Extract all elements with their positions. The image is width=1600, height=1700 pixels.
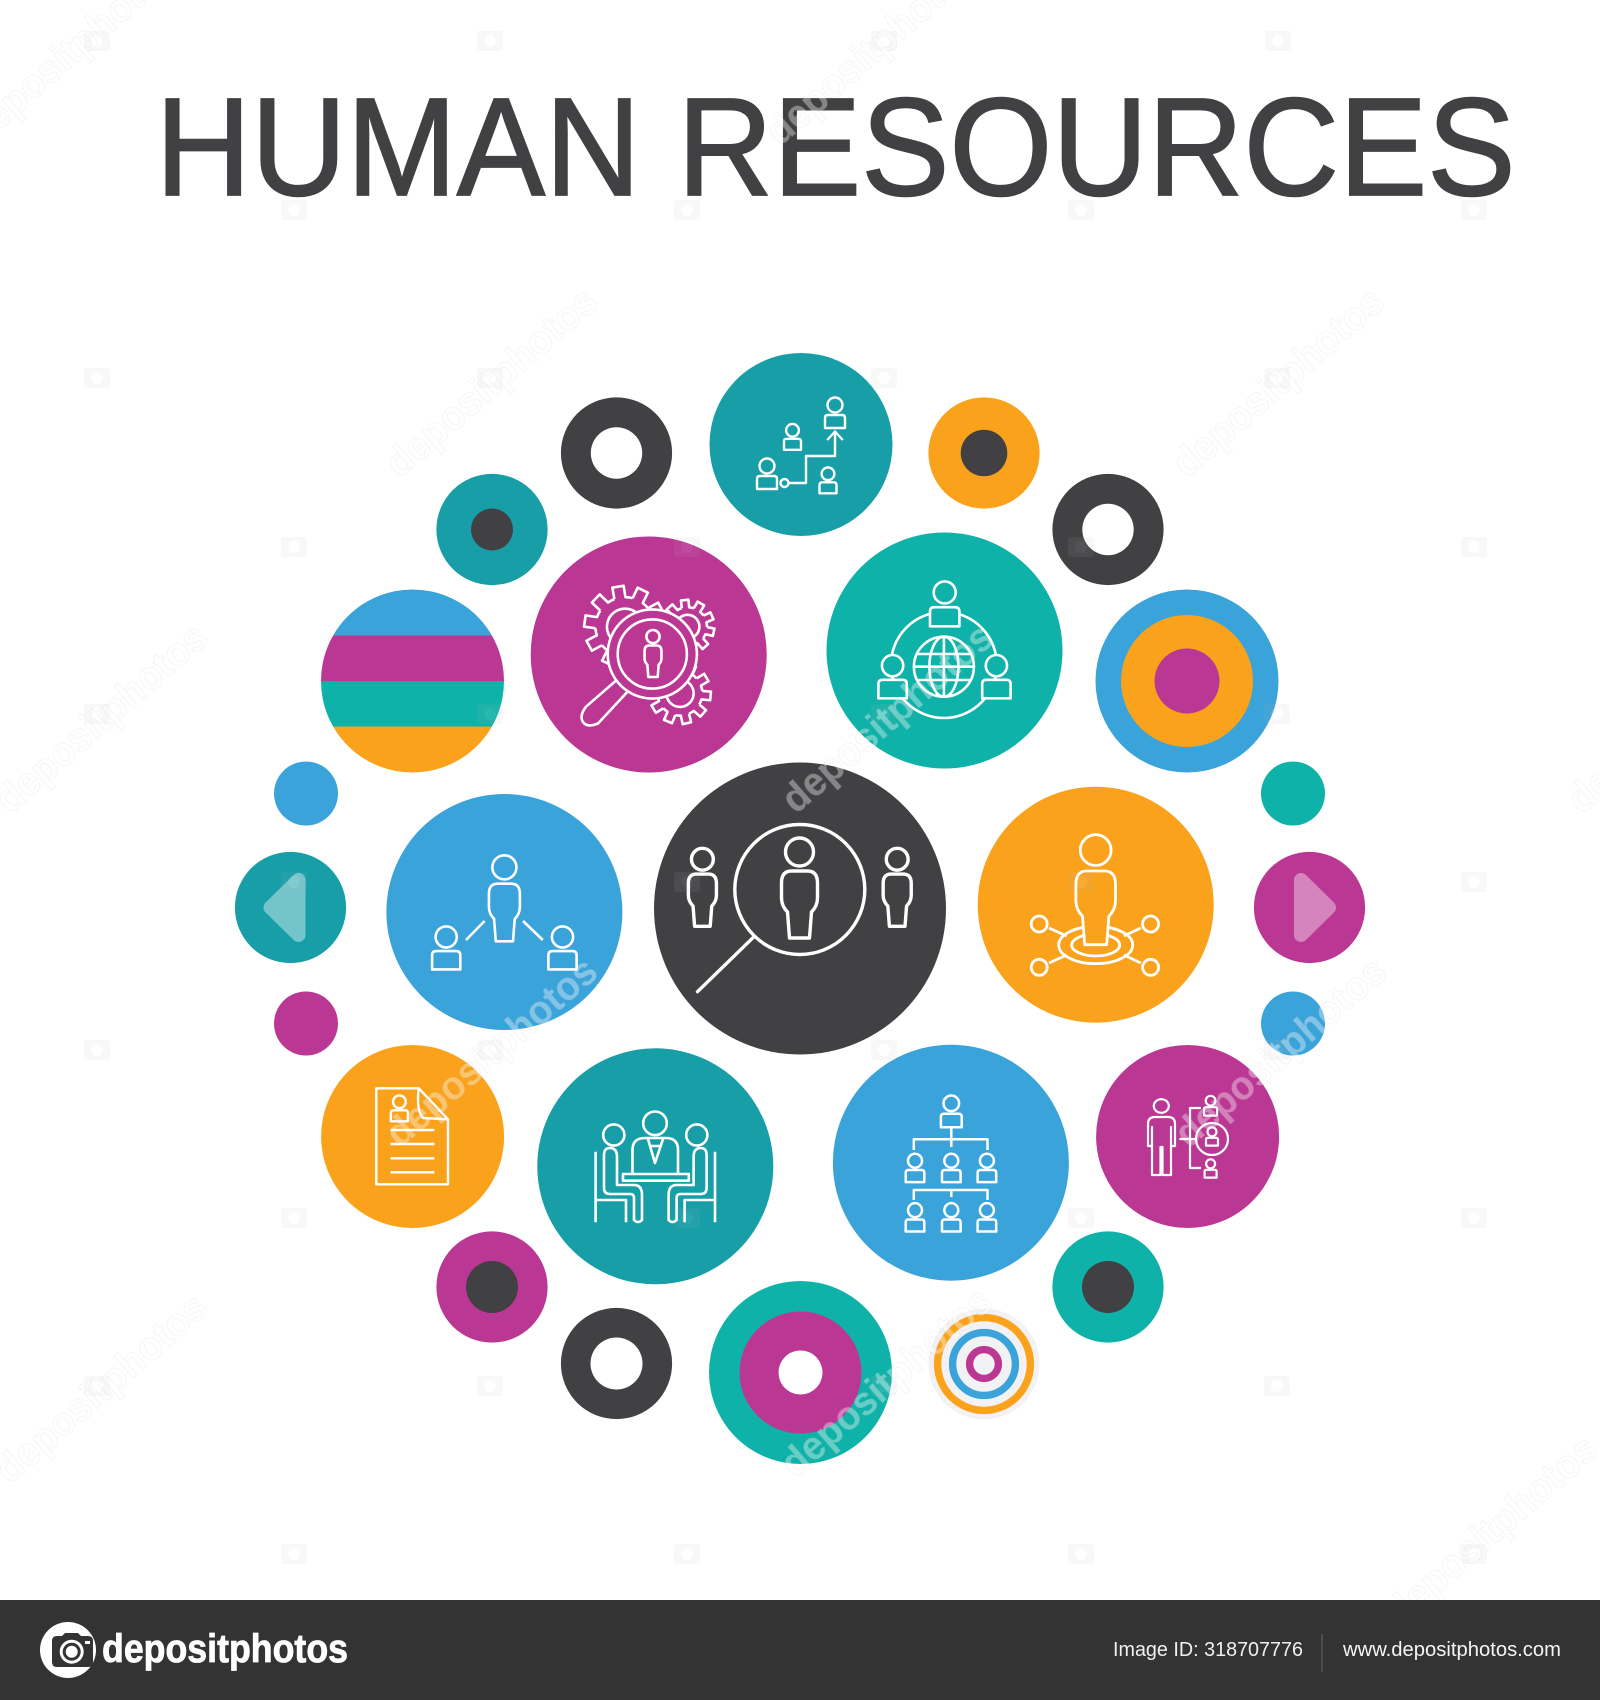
ring centre: dark lower right [1082,1261,1134,1313]
watermark text: depositphotos [772,1279,1001,1486]
bubble: person hub [978,787,1214,1023]
icon: right triangle [1301,880,1329,935]
bubble: resume [321,1045,504,1228]
dot: blue right [1261,992,1325,1056]
icon: person on network hub [1031,835,1159,975]
ring centre: dark lower left [466,1261,518,1313]
ring centre: white top left [591,427,642,479]
bubble: org chart [833,1045,1069,1281]
bubble: career steps [710,353,892,536]
ring: orange top right [928,397,1040,509]
watermark camera marks [84,31,1487,1564]
icon: talent search gears [579,579,719,728]
footer separator [1322,1634,1323,1672]
infographic circle diagram [235,353,1365,1464]
bubble: central search [654,762,946,1054]
footer bar [0,1600,1600,1700]
ring centre: dark top right [961,430,1007,476]
icon: left triangle [270,880,298,935]
ring: dark bottom left [561,1308,672,1419]
ring centre: white upper right [1082,504,1134,555]
ring: teal lower right [1052,1231,1164,1343]
icon: resume document [376,1088,448,1184]
icon: people around globe [878,581,1011,718]
bubble: concentric target right [1096,590,1278,772]
footer logo wordmark: depositphotos [102,1627,348,1671]
bubble: team relations [386,794,622,1030]
image id: Image ID: 318707776 [1113,1639,1303,1661]
icon: magnifier over people [688,824,911,992]
bubble: manager and tree [1096,1045,1279,1228]
footer logo icon [40,1622,96,1678]
icon: career ladder [757,398,845,493]
dot: magenta left [274,992,338,1056]
watermark text: depositphotos [1164,279,1393,486]
bubble: concentric bottom [709,1281,892,1464]
icon: person with hierarchy [1148,1096,1228,1178]
watermark text: depositphotos [377,949,606,1156]
watermark text: depositphotos [377,279,606,486]
ring centre: white bottom left [590,1338,642,1390]
button: previous arrow [235,852,346,963]
ring: dark upper right [1052,474,1164,585]
dot: teal right [1261,762,1325,826]
icon: organisation chart [906,1096,996,1232]
small target [928,1308,1040,1420]
watermark text: depositphotos [1166,949,1395,1156]
ring: dark top left [561,397,672,509]
bubble: global team [826,532,1062,768]
watermark text: depositphotos [773,615,1002,822]
bubble: meeting [537,1048,773,1284]
icon: interview at table [596,1112,715,1222]
bubble: gears and magnifier [531,536,767,772]
ring: teal upper left [436,474,548,585]
ring: magenta lower left [436,1231,548,1343]
dot: blue left [274,762,338,826]
button: next arrow [1254,852,1365,963]
ring centre: dark upper left [471,508,513,550]
bubble: striped [321,590,504,772]
icon: three people connected [432,855,577,969]
title: HUMAN RESOURCES [156,69,1516,225]
website url: www.depositphotos.com [1342,1639,1561,1661]
